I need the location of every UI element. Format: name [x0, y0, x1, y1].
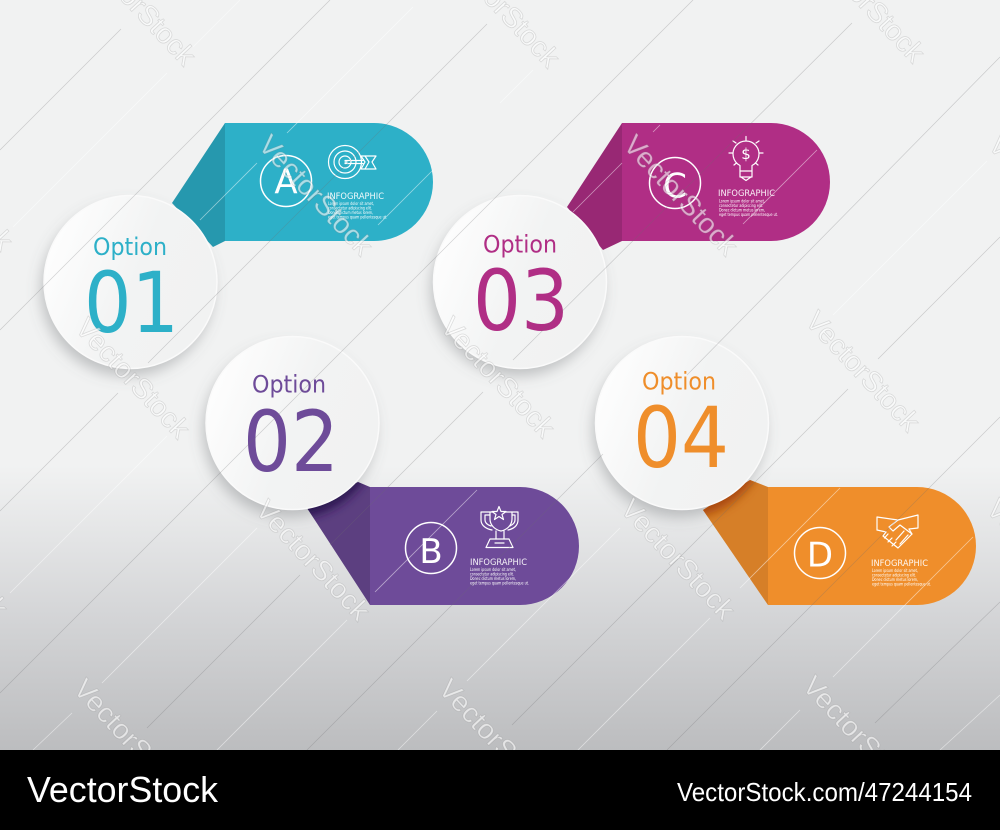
- icon: handshake: [877, 515, 918, 548]
- ribbon D: [768, 487, 976, 605]
- watermarks: VectorStock: [800, 305, 927, 438]
- text block C: INFOGRAPHIC: [718, 189, 775, 199]
- letter badge D: [794, 528, 846, 578]
- footer logo text: VectorStock: [27, 769, 219, 810]
- circle drop shadows: [41, 204, 765, 517]
- option 04 circle: [596, 336, 768, 510]
- watermarks: VectorStock: [618, 129, 745, 262]
- text block A: eget tempus quam pellentesque ut.: [328, 214, 387, 220]
- text block A: [327, 192, 387, 220]
- panel A: [172, 123, 433, 247]
- letter badge C: [650, 158, 700, 208]
- footer image id: VectorStock.com/47244154: [677, 777, 972, 807]
- text block D: eget tempus quam pellentesque ut.: [872, 582, 931, 586]
- option 01 circle: [44, 196, 217, 368]
- text block B: Lorem ipsum dolor sit amet,: [470, 567, 516, 572]
- ribbon A: [225, 123, 433, 241]
- text block D: INFOGRAPHIC: [871, 559, 928, 569]
- fold A: [172, 123, 225, 247]
- letter badge A: [260, 156, 312, 206]
- option 04 circle: Option: [642, 368, 716, 396]
- panel D: [703, 480, 976, 605]
- fold C: [567, 123, 622, 250]
- text block B: Donec dictum metus lorem,: [470, 576, 516, 581]
- fold B: [307, 482, 370, 605]
- panel C: [567, 123, 830, 250]
- text block D: Donec dictum metus lorem,: [872, 577, 918, 582]
- text block D: Lorem ipsum dolor sit amet,: [872, 568, 918, 573]
- watermarks: VectorStock: [68, 673, 195, 806]
- watermarks: VectorStock: [253, 129, 380, 262]
- ribbon C: [622, 123, 830, 241]
- option 02 circle: [206, 336, 379, 510]
- text block D: [871, 559, 931, 586]
- icon: light bulb with dollar: $: [741, 145, 751, 163]
- watermarks: VectorStock: [250, 494, 377, 627]
- text block C: Lorem ipsum dolor sit amet,: [719, 198, 765, 204]
- icon: trophy: [481, 506, 518, 548]
- letter badge B: B: [419, 532, 443, 572]
- watermarks: VectorStock: [615, 493, 742, 626]
- text block B: INFOGRAPHIC: [470, 558, 527, 568]
- option 01 circle: 01: [84, 254, 179, 352]
- option 04 circle: 04: [633, 389, 729, 487]
- text block B: [470, 558, 529, 586]
- letter badge C: C: [663, 166, 687, 206]
- icon: light bulb with dollar: [729, 136, 763, 180]
- text block C: [718, 189, 778, 217]
- fold D: [703, 480, 768, 605]
- text block A: Donec dictum metus lorem,: [328, 210, 373, 215]
- letter badge B: [406, 522, 456, 574]
- text block C: eget tempus quam pellentesque ut.: [719, 212, 778, 217]
- option 01 circle: Option: [93, 233, 167, 261]
- icon: target with arrow: [328, 146, 376, 178]
- text block A: INFOGRAPHIC: [327, 192, 384, 202]
- text block B: eget tempus quam pellentesque ut.: [470, 580, 529, 586]
- option 03 circle: [434, 196, 606, 368]
- ribbon B: [370, 487, 579, 605]
- text block C: consectetur adipiscing elit.: [719, 203, 763, 208]
- text block A: Lorem ipsum dolor sit amet,: [328, 201, 374, 206]
- panel B: [308, 482, 579, 605]
- option 02 circle: 02: [243, 393, 339, 491]
- watermarks: VectorStock: [433, 673, 560, 806]
- option 03 circle: 03: [473, 252, 569, 350]
- text block B: consectetur adipiscing elit.: [470, 572, 514, 576]
- text block C: Donec dictum metus lorem,: [719, 208, 765, 212]
- option 02 circle: Option: [252, 370, 326, 398]
- watermarks: VectorStock: [797, 670, 924, 803]
- text block A: consectetur adipiscing elit.: [328, 206, 372, 210]
- letter badge D: D: [807, 536, 833, 576]
- watermarks: VectorStock: [70, 312, 197, 445]
- fold shadow D: [703, 480, 758, 519]
- watermarks: VectorStock: [435, 311, 562, 444]
- letter badge A: A: [274, 162, 298, 202]
- text block D: consectetur adipiscing elit.: [872, 572, 916, 578]
- fold shadow B: [308, 482, 367, 520]
- footer bar: [0, 750, 1000, 830]
- option 03 circle: Option: [483, 230, 557, 258]
